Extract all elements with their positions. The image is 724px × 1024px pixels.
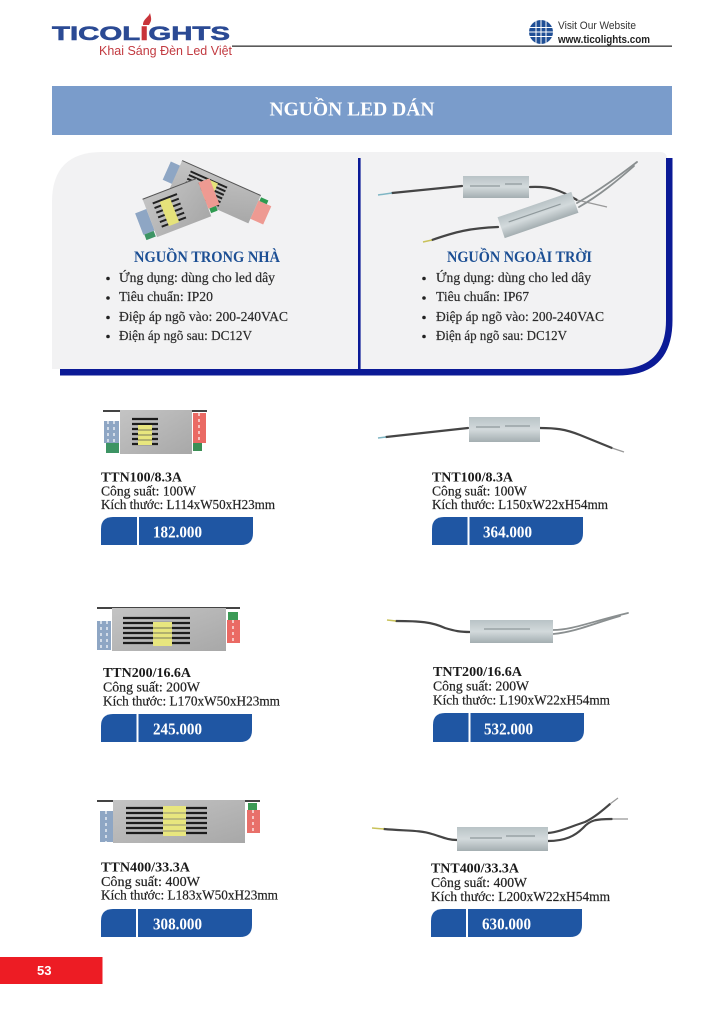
page number: 53 xyxy=(37,964,52,978)
price tag: 245.000 xyxy=(153,720,202,738)
name: TNT200/16.6A xyxy=(433,665,523,680)
list: indoor specs xyxy=(106,269,288,344)
product: TNT400 xyxy=(372,798,628,937)
panel: power supply types xyxy=(52,152,672,376)
name: TTN200/16.6A xyxy=(103,666,192,681)
product: TTN400 xyxy=(97,800,278,937)
image: TTN100 xyxy=(103,410,207,454)
panel background xyxy=(52,152,667,369)
specs: Công suất: 400W xyxy=(101,875,201,890)
list: indoor specs: Ứng dụng: dùng cho led dây xyxy=(119,269,275,286)
website text xyxy=(557,20,650,46)
image: indoor power supplies xyxy=(131,156,274,241)
header rule xyxy=(232,46,672,47)
price tag: 630.000 xyxy=(482,914,531,934)
specs: Kích thước: L190xW22xH54mm xyxy=(433,694,610,708)
product: TTN100 xyxy=(101,410,275,545)
image: TNT200 xyxy=(387,613,628,643)
name: TTN400/33.3A xyxy=(101,860,191,876)
website text: Visit Our Website xyxy=(558,20,636,32)
specs xyxy=(431,876,610,905)
specs: Công suất: 100W xyxy=(432,484,528,500)
specs xyxy=(103,680,280,710)
list: outdoor specs: Điệp áp ngõ vào: 200-240VAC xyxy=(436,310,604,325)
product: TNT100 xyxy=(378,417,624,545)
specs: Kích thước: L150xW22xH54mm xyxy=(432,498,608,513)
price tag: 182.000 xyxy=(153,522,202,542)
page number xyxy=(0,957,102,984)
specs: Công suất: 200W xyxy=(103,680,201,696)
name: TNT100/8.3A xyxy=(432,470,514,486)
list: outdoor specs: Điện áp ngõ sau: DC12V xyxy=(436,329,567,344)
header logo xyxy=(52,13,232,58)
specs: Công suất: 200W xyxy=(433,680,530,694)
price tag: 308.000 xyxy=(153,914,202,934)
image: TNT400 xyxy=(372,798,628,851)
image: TTN400 xyxy=(97,800,260,843)
list: outdoor specs: Ứng dụng: dùng cho led dây xyxy=(436,269,591,286)
title banner xyxy=(52,86,672,135)
list: indoor specs: Điện áp ngõ sau: DC12V xyxy=(119,329,252,344)
list: indoor specs: Điệp áp ngõ vào: 200-240VAC xyxy=(119,310,288,325)
price tag xyxy=(432,517,583,545)
specs xyxy=(101,484,275,513)
heading: outdoor: NGUỒN NGOÀI TRỜI xyxy=(447,248,592,266)
price tag: 532.000 xyxy=(484,720,533,738)
specs xyxy=(101,875,278,904)
panel blue frame xyxy=(60,158,672,376)
name: TTN100/8.3A xyxy=(101,470,183,486)
specs: Kích thước: L170xW50xH23mm xyxy=(103,694,280,710)
logo wordmark: TICOL IGHTS xyxy=(52,23,230,45)
name: TNT400/33.3A xyxy=(431,862,520,876)
specs xyxy=(433,680,610,708)
logo flame icon xyxy=(143,13,151,25)
list: outdoor specs: Tiêu chuẩn: IP67 xyxy=(436,290,529,305)
specs: Kích thước: L114xW50xH23mm xyxy=(101,498,275,513)
specs: Công suất: 100W xyxy=(101,484,197,500)
specs: Kích thước: L183xW50xH23mm xyxy=(101,888,278,904)
icon: globe xyxy=(529,20,553,44)
image: TNT100 xyxy=(378,417,624,452)
image: TTN200 xyxy=(97,607,240,651)
price tag xyxy=(101,517,253,545)
specs xyxy=(432,484,608,513)
website text: www.ticolights.com xyxy=(557,34,650,46)
price tag xyxy=(431,909,582,937)
price tag xyxy=(433,713,584,742)
specs: Kích thước: L200xW22xH54mm xyxy=(431,890,610,905)
price tag xyxy=(101,714,252,742)
product: TTN200 xyxy=(97,607,280,742)
specs: Công suất: 400W xyxy=(431,876,528,891)
heading: indoor: NGUỒN TRONG NHÀ xyxy=(134,248,281,266)
list: outdoor specs xyxy=(422,269,604,344)
logo tagline: Khai Sáng Đèn Led Việt xyxy=(99,43,232,58)
price tag: 364.000 xyxy=(483,522,532,542)
title banner: NGUỒN LED DÁN xyxy=(270,96,435,120)
price tag xyxy=(101,909,252,937)
product: TNT200 xyxy=(387,613,628,742)
panel divider xyxy=(358,158,361,370)
list: indoor specs: Tiêu chuẩn: IP20 xyxy=(119,290,213,305)
image: outdoor power supplies xyxy=(378,162,637,242)
